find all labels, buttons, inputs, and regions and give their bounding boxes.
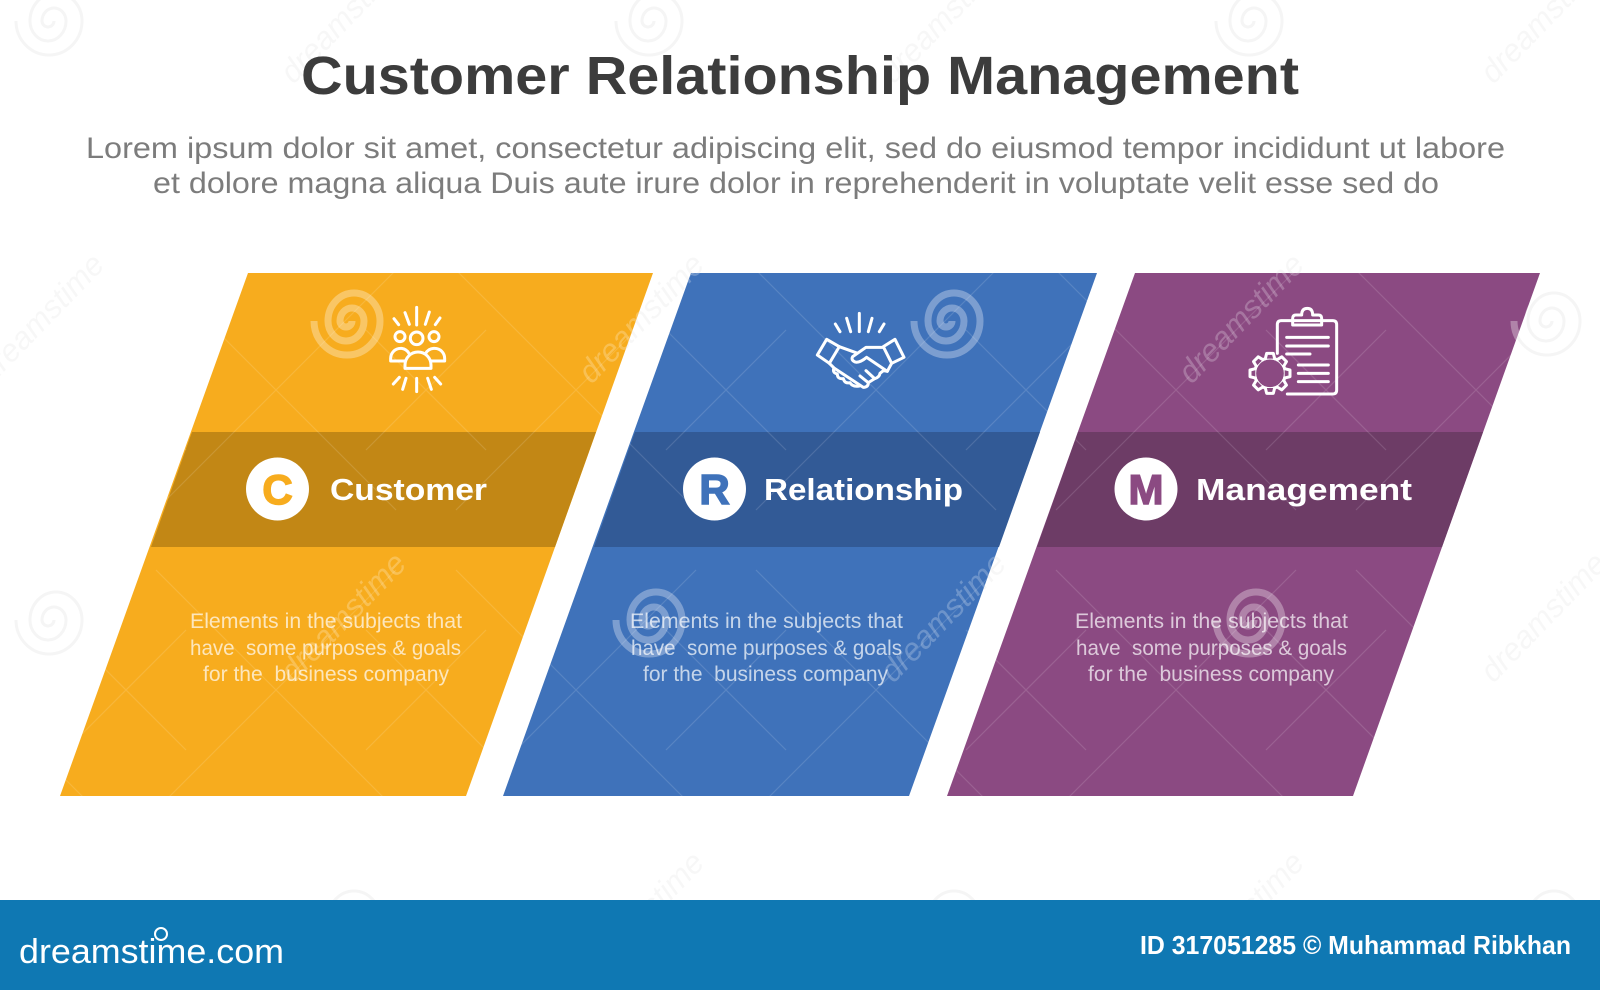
text block: relationship: Elements in the subjects that: [630, 610, 903, 633]
panel: customer: [60, 273, 653, 796]
badge: R: R: [699, 466, 730, 513]
icon: clipboard with gear: [1250, 308, 1337, 394]
subtitle: et dolore magna aliqua Duis aute irure dolor in reprehenderit in voluptate velit esse sed do: [153, 167, 1439, 200]
label: Customer: Customer: [330, 472, 487, 507]
panel: management: [947, 273, 1540, 796]
band: relationship: [594, 432, 1040, 547]
text block: management: [1075, 610, 1348, 686]
text block: management: have some purposes & goals: [1076, 637, 1347, 660]
text block: customer: for the business company: [203, 663, 449, 686]
text block: customer: Elements in the subjects that: [190, 610, 462, 633]
badge: M: [1114, 458, 1178, 520]
text block: customer: [190, 610, 462, 686]
icon: handshake: [817, 313, 904, 387]
panel: relationship: [503, 273, 1097, 796]
badge: C: C: [262, 466, 293, 513]
text block: management: Elements in the subjects that: [1075, 610, 1348, 633]
band: management: [1037, 432, 1483, 547]
text block: relationship: [630, 610, 903, 686]
badge: C: [246, 458, 309, 520]
title: Customer Relationship Management: [301, 46, 1299, 106]
text block: customer: have some purposes & goals: [190, 637, 461, 660]
footer logo: dreamstime.com: [19, 933, 284, 971]
subtitle: Lorem ipsum dolor sit amet, consectetur adipiscing elit, sed do eiusmod tempor incididunt ut labore: [86, 132, 1505, 165]
text block: relationship: have some purposes & goals: [631, 637, 902, 660]
footer bar: [0, 900, 1600, 990]
label: Relationship: Relationship: [764, 472, 963, 507]
badge: R: [683, 458, 746, 520]
subtitle: [86, 132, 1505, 200]
text block: management: for the business company: [1088, 663, 1334, 686]
label: Management: Management: [1196, 472, 1412, 507]
icon: customer group: [391, 307, 445, 392]
badge: M: M: [1128, 466, 1164, 513]
text block: relationship: for the business company: [643, 663, 888, 686]
footer credit: ID 317051285 © Muhammad Ribkhan: [1140, 930, 1571, 960]
band: customer: [151, 432, 596, 547]
